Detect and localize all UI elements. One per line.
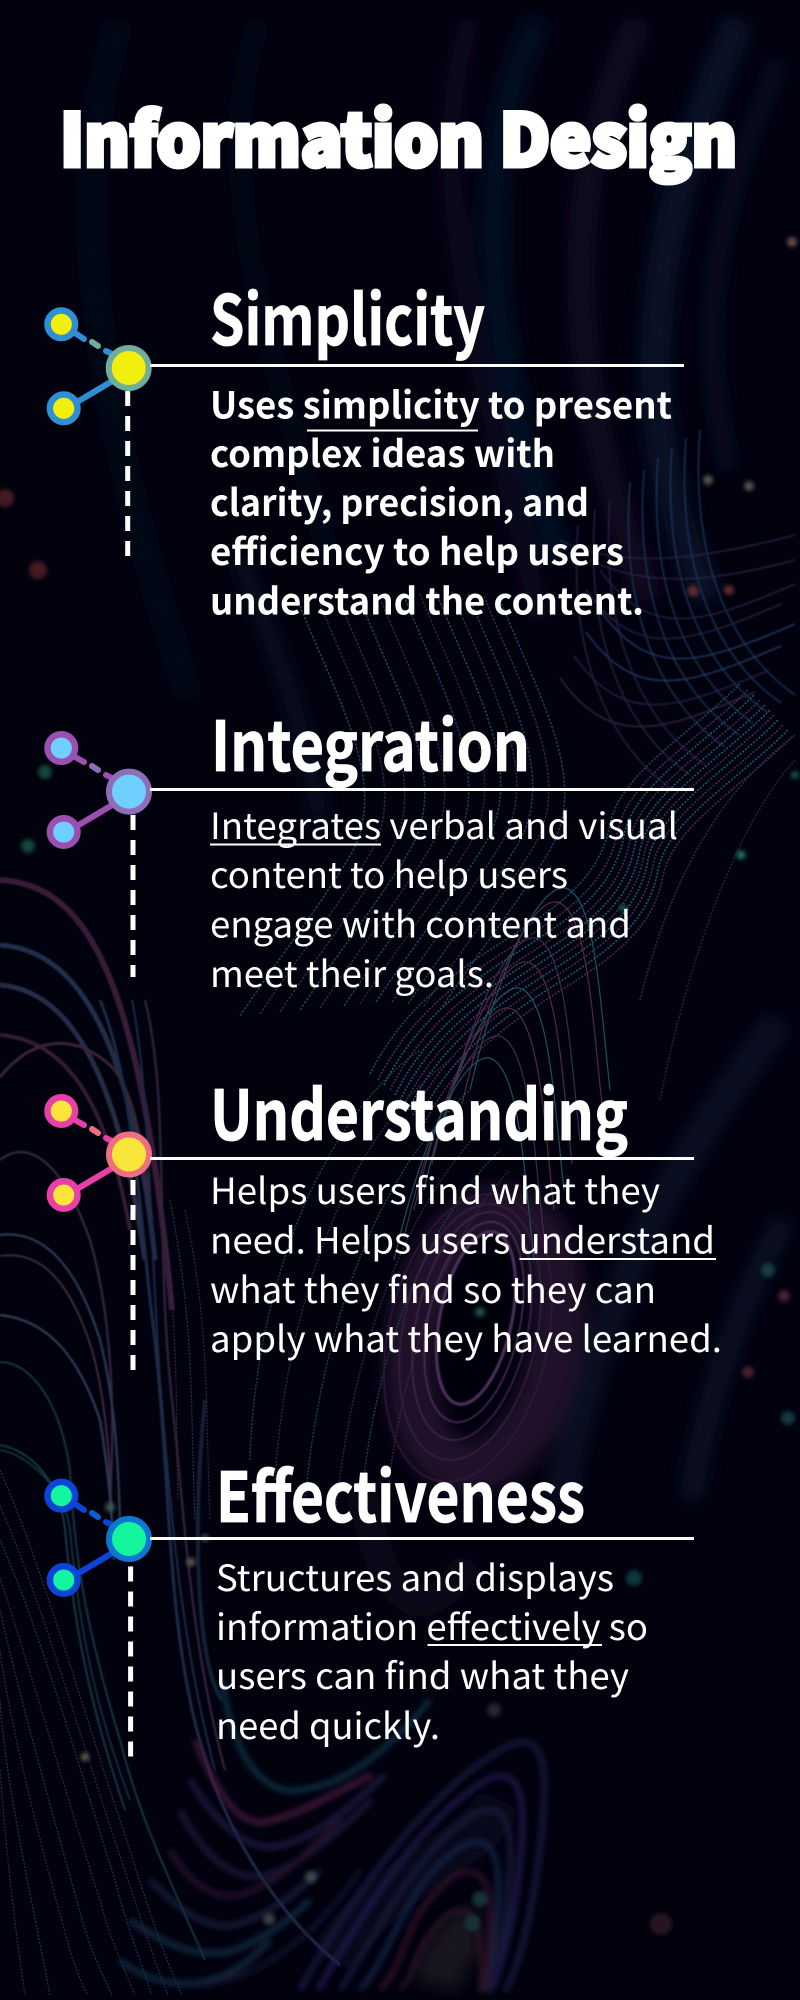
body text: engage with content and xyxy=(210,896,631,948)
panel: Effectiveness xyxy=(48,1442,694,1757)
heading: Understanding: Understanding xyxy=(210,1060,628,1160)
body text: clarity, precision, and xyxy=(210,473,589,527)
body text: information effectively so xyxy=(216,1599,648,1651)
body text: Structures and displays xyxy=(216,1550,614,1602)
body text: need quickly. xyxy=(216,1698,440,1750)
divider rule xyxy=(150,1537,694,1540)
body text: what they find so they can xyxy=(210,1262,656,1314)
heading: Integration: Integration xyxy=(211,691,530,791)
divider rule xyxy=(150,1157,694,1160)
heading: Simplicity: Simplicity xyxy=(210,265,485,365)
icon: blue and purple network nodes xyxy=(48,734,149,846)
body text: content to help users xyxy=(210,847,568,899)
panel: Simplicity xyxy=(48,265,684,626)
body text: efficiency to help users xyxy=(210,522,624,576)
body text: apply what they have learned. xyxy=(210,1311,722,1363)
panel: Understanding xyxy=(48,1060,722,1371)
body text: Integrates verbal and visual xyxy=(210,798,678,850)
body text xyxy=(210,798,678,998)
panel: Integration xyxy=(48,691,694,998)
icon: yellow and pink network nodes xyxy=(48,1097,149,1209)
title: Information Design xyxy=(60,82,737,187)
body text: meet their goals. xyxy=(210,946,494,998)
icon: green and blue network nodes xyxy=(48,1482,149,1594)
dashed connector xyxy=(128,1566,133,1757)
body text: Helps users find what they xyxy=(210,1163,660,1215)
divider rule xyxy=(150,788,694,791)
dashed connector xyxy=(130,1180,136,1371)
body text: users can find what they xyxy=(216,1648,629,1700)
body text: understand the content. xyxy=(210,572,644,626)
dashed connector xyxy=(130,815,136,977)
body text: complex ideas with xyxy=(210,424,555,478)
body text xyxy=(210,1163,722,1363)
body text xyxy=(216,1550,648,1750)
divider rule xyxy=(150,364,684,367)
icon: yellow and blue network nodes xyxy=(48,310,149,422)
body text: need. Helps users understand xyxy=(210,1212,715,1264)
heading: Effectiveness: Effectiveness xyxy=(216,1442,585,1542)
dashed connector xyxy=(125,391,130,556)
body text xyxy=(210,376,672,626)
body text: Uses simplicity to present xyxy=(210,376,672,430)
